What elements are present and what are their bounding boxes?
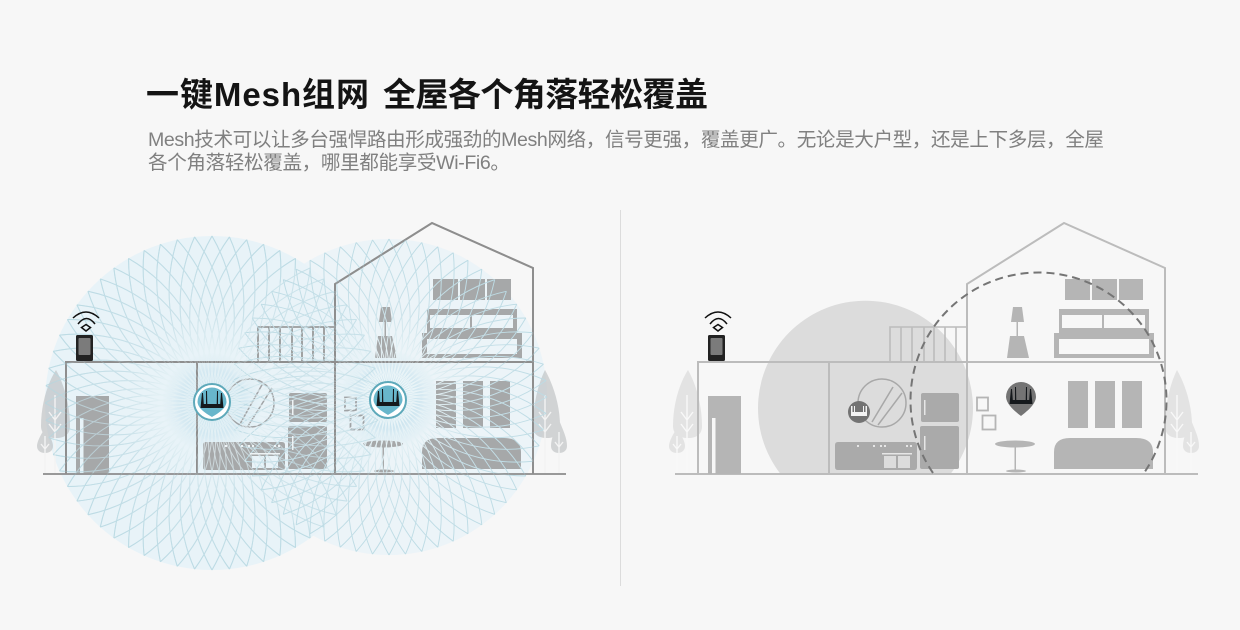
- description text: [148, 129, 1104, 174]
- icon: small router: [848, 401, 870, 423]
- refrigerator: [288, 393, 327, 469]
- signal lines: first router: [45, 236, 379, 570]
- router glow: [162, 350, 439, 453]
- table: [995, 440, 1035, 472]
- sofa: [422, 438, 521, 469]
- round mirror: [858, 379, 906, 427]
- table: [363, 440, 403, 472]
- lamp and nightstand: [375, 307, 397, 358]
- refrigerator: [920, 393, 959, 469]
- bed: [1054, 309, 1154, 358]
- furniture: [708, 279, 1154, 474]
- title: 一键Mesh组网: [146, 76, 369, 113]
- windows: [436, 381, 510, 428]
- description text: 各个角落轻松覆盖，哪里都能享受Wi-Fi6。: [148, 152, 510, 174]
- trees: [37, 370, 567, 453]
- bed: [422, 309, 522, 358]
- house outline: [675, 223, 1198, 474]
- wall art: [1065, 279, 1143, 300]
- windows: [1068, 381, 1142, 428]
- panel: without mesh: [669, 223, 1199, 474]
- coverage disc: [758, 301, 973, 474]
- signal lines: second router: [231, 239, 547, 555]
- lamp and nightstand: [1007, 307, 1029, 358]
- title: [146, 76, 708, 113]
- kitchen counter: [835, 442, 917, 470]
- house walls over signal: [43, 223, 566, 474]
- picture frames: [345, 398, 364, 430]
- trees: [669, 370, 1199, 453]
- signal lines over first-floor furniture: [45, 236, 379, 570]
- dashed coverage arc: [910, 273, 1166, 473]
- icon: phone with wifi: [73, 312, 99, 361]
- tree trunks: [41, 395, 563, 474]
- coverage disc: second router: [231, 239, 547, 555]
- sofa: [1054, 438, 1153, 469]
- counter details: [225, 400, 294, 454]
- door: [76, 396, 109, 474]
- description text: Mesh技术可以让多台强悍路由形成强劲的Mesh网络，信号更强，覆盖更广。无论是大户型，还是上下多层，全屋: [148, 129, 1104, 151]
- icon: router 1: [194, 384, 230, 420]
- picture frames: [977, 398, 996, 430]
- kitchen counter: [203, 442, 285, 470]
- tree trunks: [673, 395, 1195, 474]
- house outline: [43, 223, 566, 474]
- counter details: [857, 400, 926, 454]
- icon: main router: [1006, 382, 1036, 416]
- panel: with mesh: [37, 223, 567, 570]
- icon: router 2: [370, 382, 406, 418]
- round mirror: [226, 379, 274, 427]
- furniture: [76, 279, 522, 474]
- coverage disc: first router: [45, 236, 379, 570]
- icon: phone with wifi: [705, 312, 731, 361]
- wall art: [433, 279, 511, 300]
- divider: [620, 210, 621, 586]
- title: 全屋各个角落轻松覆盖: [383, 76, 708, 113]
- door: [708, 396, 741, 474]
